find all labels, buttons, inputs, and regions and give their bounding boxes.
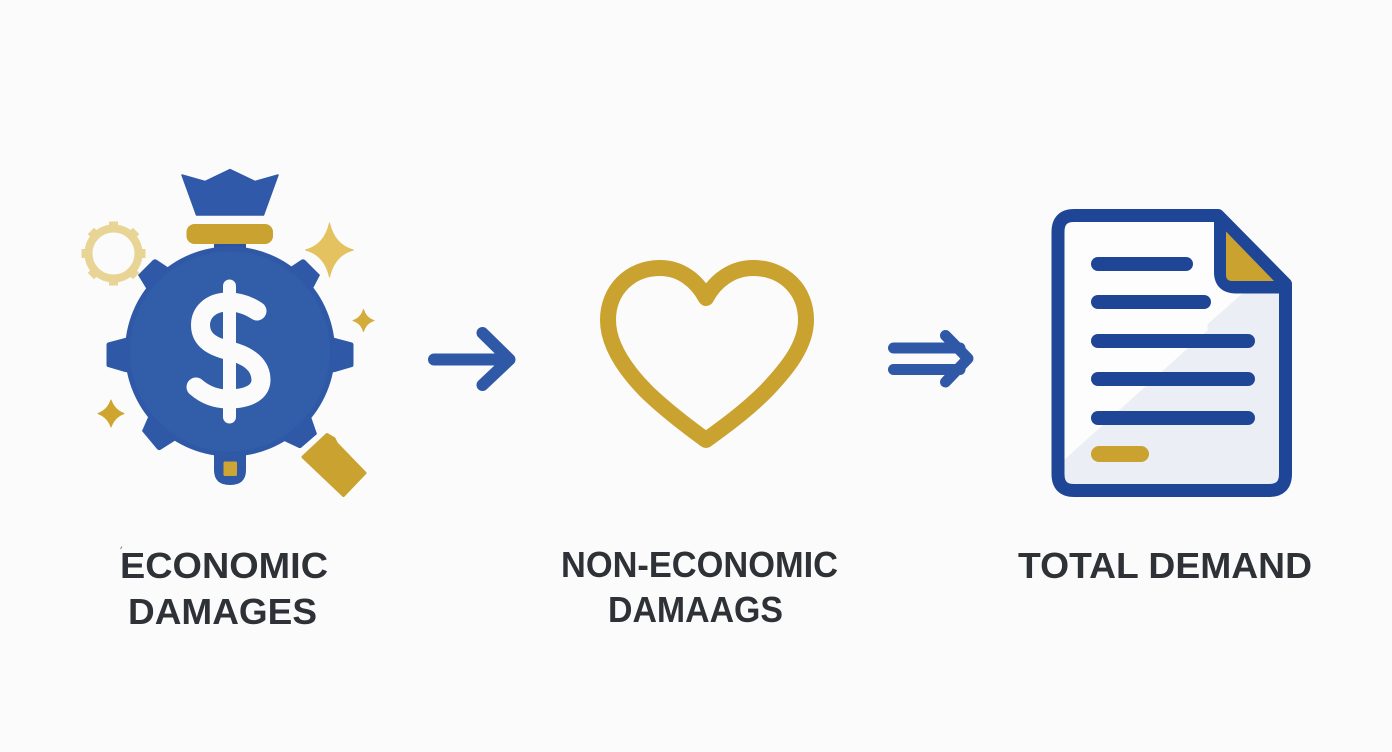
gold band bbox=[186, 224, 273, 244]
label: total demand: TOTAL DEMAND bbox=[1018, 545, 1312, 586]
dollar sign bbox=[196, 286, 261, 417]
label: non-economic damages: DAMAAGS bbox=[608, 589, 783, 630]
panel: economic damages bbox=[82, 170, 374, 632]
label: economic damages: ECONOMIC bbox=[120, 545, 328, 586]
label: non-economic damages bbox=[561, 544, 838, 630]
small pale gear bbox=[82, 222, 146, 286]
gold line bbox=[1091, 446, 1149, 462]
gold corner bbox=[1226, 232, 1274, 281]
icon: document bbox=[1058, 216, 1286, 490]
sparkle right bbox=[353, 310, 374, 332]
gear face bbox=[130, 252, 330, 452]
label: economic damages bbox=[120, 545, 328, 632]
icon: money bag gear bbox=[82, 170, 374, 496]
panel: non-economic damages bbox=[561, 268, 838, 630]
arrow: double bbox=[894, 336, 968, 382]
page outline bbox=[1058, 216, 1286, 490]
magnifier handle bbox=[303, 434, 365, 496]
sparkle left bbox=[98, 400, 124, 427]
bottom tab bbox=[214, 450, 246, 485]
text lines bbox=[1091, 257, 1255, 425]
icon: heart bbox=[608, 268, 806, 440]
bag neck bbox=[214, 240, 246, 252]
folded corner bbox=[1220, 218, 1285, 287]
page sheet bbox=[1058, 216, 1286, 490]
bag crown bbox=[182, 170, 278, 215]
panel: total demand bbox=[1018, 216, 1312, 586]
label: economic damages: DAMAGES bbox=[128, 591, 317, 632]
gold clasp in tab bbox=[224, 462, 237, 476]
label: non-economic damages: NON-ECONOMIC bbox=[561, 544, 838, 585]
page shading bbox=[1064, 293, 1280, 484]
gear body bbox=[106, 246, 354, 485]
arrow: single bbox=[434, 333, 510, 385]
sparkle large bbox=[306, 223, 354, 277]
